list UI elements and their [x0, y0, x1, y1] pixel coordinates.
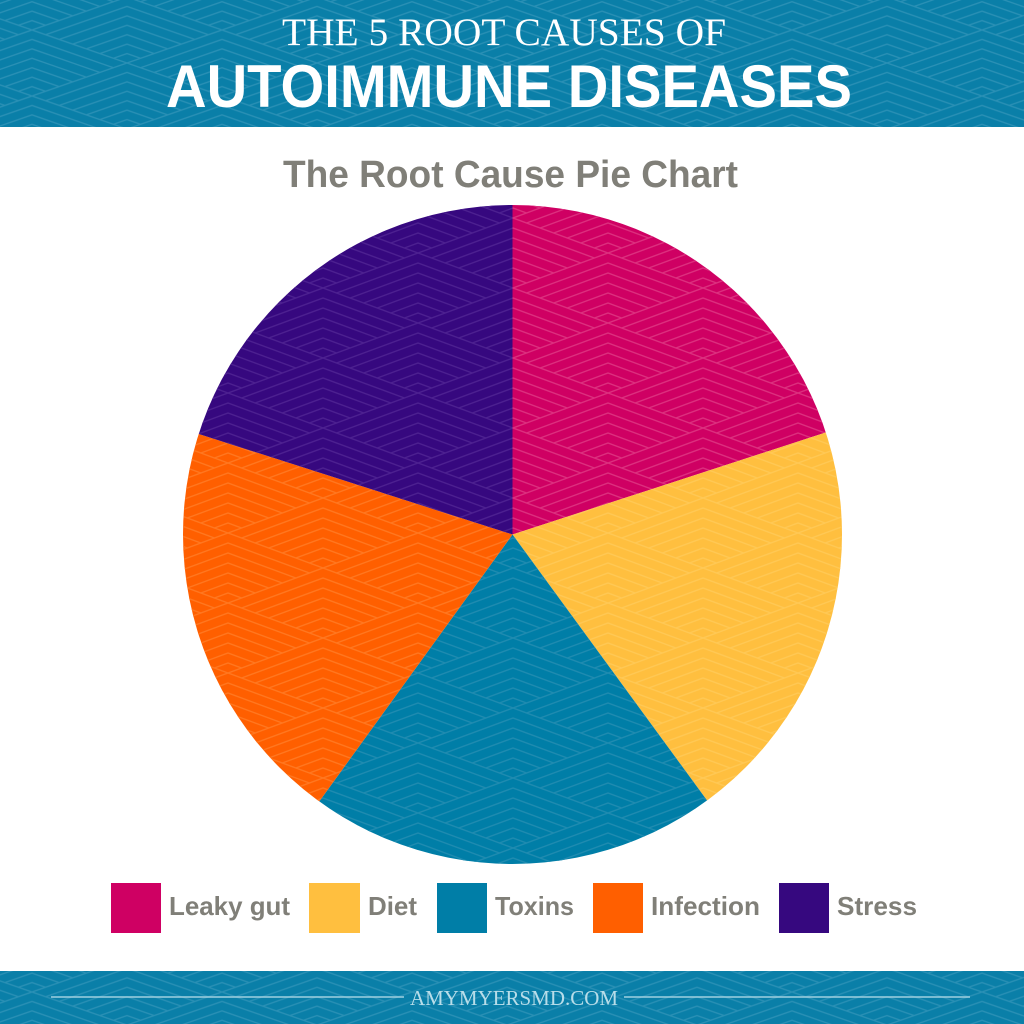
legend item: diet: Diet [368, 891, 417, 921]
chart heading: The Root Cause Pie Chart [283, 154, 738, 196]
title line 1: THE 5 ROOT CAUSES OF [282, 11, 726, 54]
slice: diet [512, 432, 842, 800]
slice: stress [198, 205, 512, 534]
legend item: stress: Stress [837, 891, 917, 921]
slice: leaky gut [512, 205, 826, 534]
legend item: leaky gut: Leaky gut [169, 891, 290, 921]
legend item: leaky gut [111, 883, 290, 933]
title line 2: AUTOIMMUNE DISEASES [166, 53, 852, 120]
legend [111, 883, 917, 933]
pie chart [183, 205, 842, 864]
footer website: AMYMYERSMD.COM [410, 986, 618, 1010]
legend item: toxins [437, 883, 574, 933]
legend item: infection: Infection [651, 891, 760, 921]
legend item: toxins: Toxins [495, 891, 574, 921]
header banner [0, 0, 1024, 127]
legend item: stress [779, 883, 917, 933]
footer banner [0, 971, 1024, 1024]
slice: infection [183, 434, 512, 802]
legend item: diet [309, 883, 417, 933]
slice: toxins [319, 534, 707, 864]
legend item: infection [593, 883, 760, 933]
